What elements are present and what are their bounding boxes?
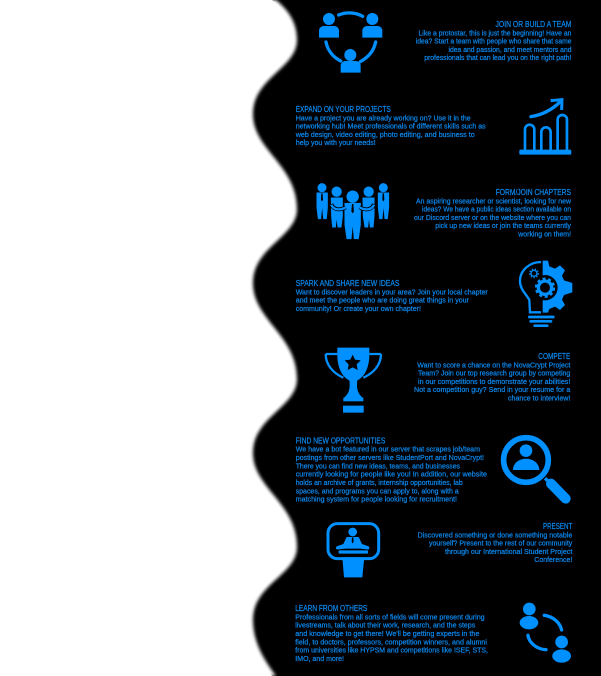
text: find new opportunities: We have a bot featured in our server that scrapes job/team <box>296 445 480 454</box>
text: form/join chapters: ideas? We have a public ideas section available on <box>422 205 571 214</box>
text: compete: chance to interview! <box>508 394 570 402</box>
text: present: through our International Student Project <box>445 547 573 556</box>
text: expand on your projects: Have a project you are already working on? Use it in the <box>296 113 471 122</box>
text: learn from others: livestreams, talk about their work, research, and the steps <box>295 621 475 630</box>
text: present <box>418 522 573 564</box>
text: spark and share new ideas: Want to discover leaders in your area? Join your local chapter <box>296 287 488 296</box>
text: compete: Want to score a chance on the NovaCrypt Project <box>417 360 571 369</box>
text: form/join chapters: our Discord server or on the website where you can <box>414 213 571 222</box>
icon: speaker at podium <box>328 524 379 577</box>
text: present: Conference! <box>534 555 572 564</box>
text: expand on your projects <box>295 105 486 147</box>
text: join or build a team: idea? Start a team with people who share that same <box>416 37 572 46</box>
text: compete: Not a competition guy? Send in your resume for a <box>414 385 571 394</box>
text: learn from others: field, to doctors, professors, competition winners, and alumni <box>295 637 487 646</box>
text: join or build a team: JOIN OR BUILD A TEAM <box>496 20 572 29</box>
text: form/join chapters: FORM/JOIN CHAPTERS <box>496 188 571 197</box>
text: compete <box>414 352 571 402</box>
icon: magnifier with person <box>504 438 566 499</box>
text: learn from others: IMO, and more! <box>295 654 344 663</box>
icon: lightbulb with gears <box>520 261 572 326</box>
text: find new opportunities: holds an archive of grants, internship opportunities, lab <box>296 478 463 487</box>
text: expand on your projects: networking hub! Meet professionals of different skills such as <box>296 122 486 131</box>
text: spark and share new ideas: and meet the people who are doing great things in your <box>296 296 469 305</box>
text: find new opportunities: matching system for people looking for recruitment! <box>296 495 457 504</box>
icon: trophy <box>326 348 381 413</box>
text: compete: COMPETE <box>538 352 570 361</box>
text: join or build a team: professionals that can lead you on the right path! <box>424 53 572 62</box>
text: join or build a team: Like a protostar, this is just the beginning! Have an <box>418 28 572 37</box>
text: join or build a team: idea and passion, and meet mentors and <box>448 45 572 54</box>
text: present: PRESENT <box>543 522 572 531</box>
text: find new opportunities: spaces, and programs you can apply to, along with a <box>296 486 459 495</box>
text: form/join chapters: pick up new ideas or join the teams currently <box>435 221 571 230</box>
text: find new opportunities: There you can find new ideas, teams, and businesses <box>296 461 460 470</box>
text: join or build a team <box>416 20 572 62</box>
icon: two people exchange <box>520 603 571 663</box>
text: learn from others: LEARN FROM OTHERS <box>295 604 367 613</box>
text: find new opportunities <box>296 436 487 504</box>
text: learn from others <box>295 604 488 663</box>
text: find new opportunities: currently looking for people like you! In addition, our website <box>296 470 487 479</box>
icon: group of people <box>317 184 389 239</box>
wavy white left panel <box>0 0 297 676</box>
text: learn from others: from universities like HYPSM and competitions like ISEF, STS, <box>295 646 488 655</box>
text: present: Discovered something or done something notable <box>418 530 572 539</box>
icon: team circle <box>319 13 382 73</box>
text: present: yourself? Present to the rest of our community <box>429 539 572 548</box>
text: find new opportunities: FIND NEW OPPORTUNITIES <box>296 436 385 445</box>
text: expand on your projects: EXPAND ON YOUR PROJECTS <box>296 105 391 114</box>
text: spark and share new ideas: community! Or create your own chapter! <box>296 304 421 313</box>
text: compete: in our competitions to demonstrate your abilities! <box>418 377 570 386</box>
text: spark and share new ideas: SPARK AND SHARE NEW IDEAS <box>296 279 399 288</box>
text: learn from others: and knowledge to get there! We'll be getting experts in the <box>295 629 479 638</box>
text: form/join chapters: working on them! <box>517 229 571 238</box>
text: expand on your projects: help you with your needs! <box>296 138 376 147</box>
icon: growth chart <box>519 100 571 155</box>
text: compete: Team? Join our top research group by competing <box>418 369 570 378</box>
text: learn from others: Professionals from all sorts of fields will come present during <box>295 612 485 621</box>
text: expand on your projects: web design, video editing, photo editing, and business to <box>295 130 475 139</box>
text: spark and share new ideas <box>296 279 488 313</box>
text: form/join chapters: An aspiring researcher or scientist, looking for new <box>416 196 571 205</box>
text: find new opportunities: postings from other servers like StudentPort and NovaCrypt! <box>296 453 484 462</box>
text: form/join chapters <box>414 188 571 238</box>
